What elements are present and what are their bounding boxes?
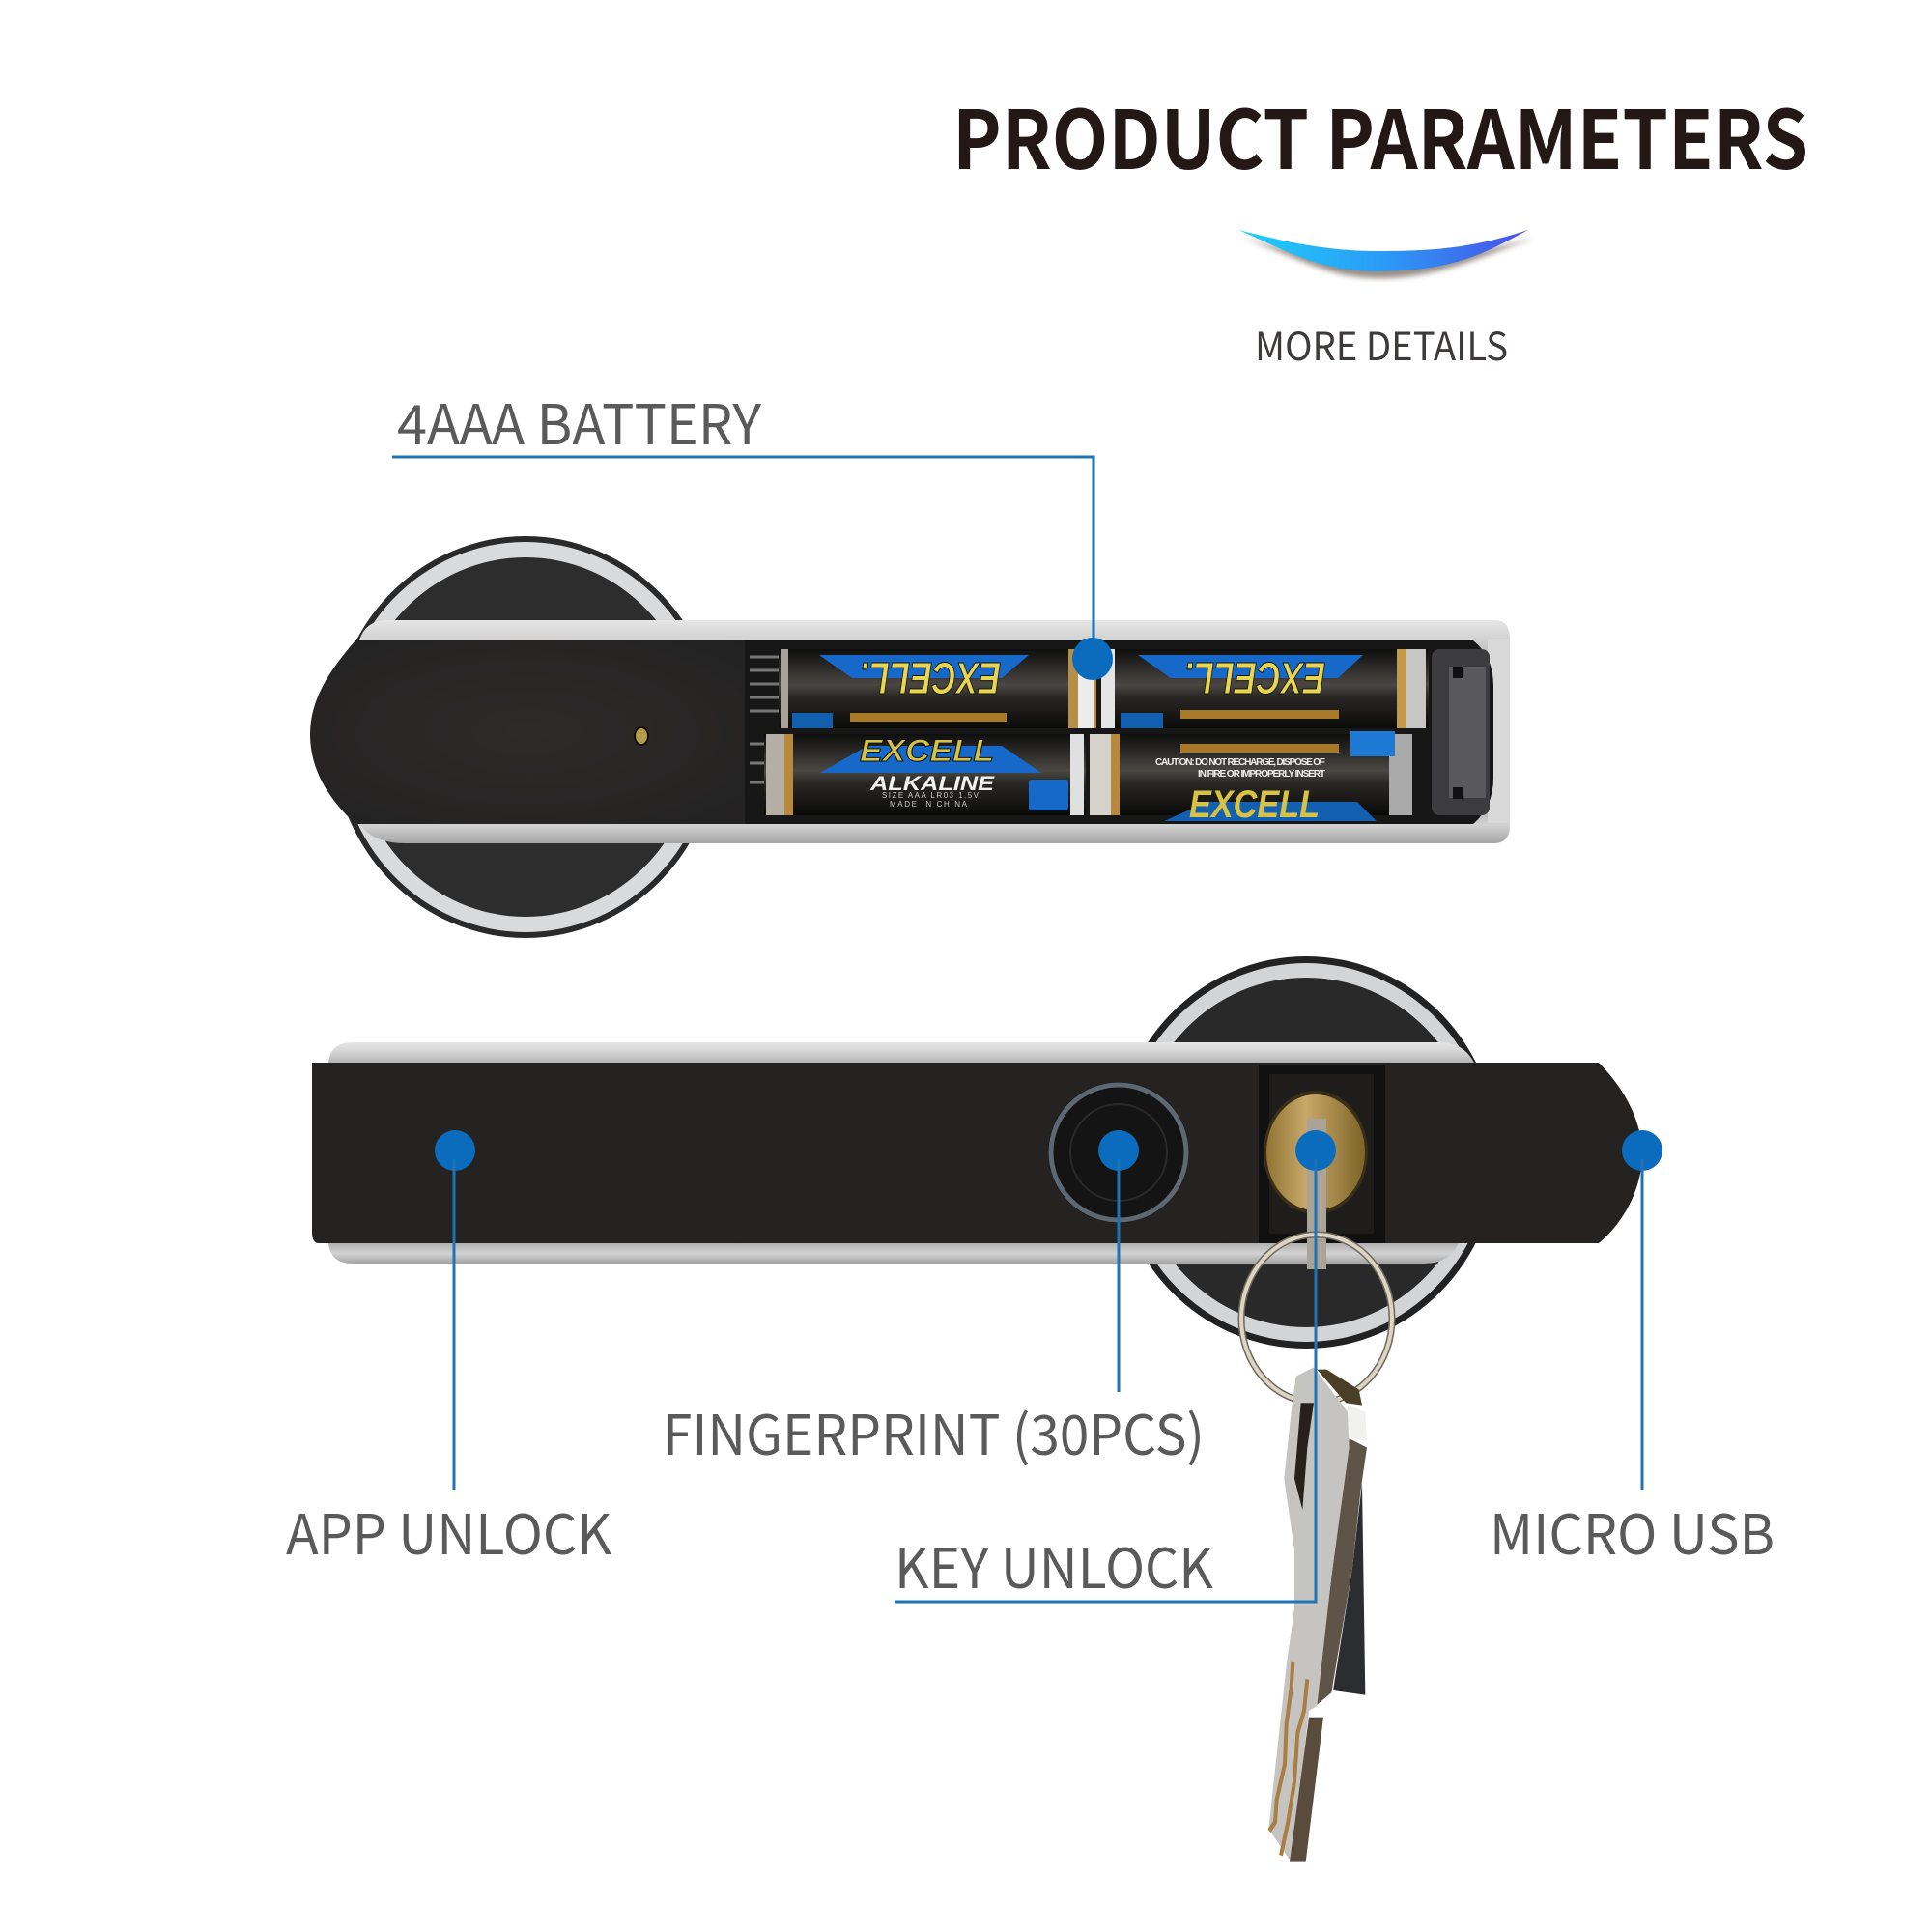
battery upper right: [1101, 649, 1429, 728]
battery upper left: EXCELL.: [860, 653, 1001, 703]
decorative blue swoosh: [1238, 230, 1535, 278]
rosette disc behind bottom handle: [1115, 956, 1497, 1349]
callout: app unlock: [286, 1130, 611, 1571]
battery lower right: EXCELL: [1189, 783, 1320, 826]
status LED: [635, 727, 648, 745]
battery upper left: [779, 649, 1096, 728]
silver housing bottom handle: [328, 1042, 1474, 1264]
callout: key unlock: KEY UNLOCK: [895, 1525, 1213, 1605]
key body: [1268, 1367, 1367, 1862]
key cylinder recess: [1259, 1065, 1385, 1243]
callout: app unlock: APP UNLOCK: [286, 1492, 611, 1571]
silver housing top handle: [359, 620, 1510, 843]
battery upper right: EXCELL.: [1184, 653, 1325, 703]
battery lower left: EXCELL: [860, 733, 994, 768]
callout: micro usb: MICRO USB: [1490, 1492, 1775, 1571]
battery lower right: CAUTION: DO NOT RECHARGE, DISPOSE OF: [1155, 757, 1325, 768]
battery lower left: ALKALINE: [869, 773, 995, 795]
battery compartment: [745, 640, 1493, 826]
bottom handle: fingerprint and key view: [312, 956, 1642, 1349]
callout: 4AAA battery: [392, 382, 1113, 680]
key shank in cylinder: [1307, 1119, 1326, 1269]
brass lock cylinder: [1264, 1091, 1368, 1214]
rosette disc behind top handle: [332, 536, 719, 938]
title: PRODUCT PARAMETERS: [952, 76, 1808, 193]
battery lower right: [1090, 731, 1412, 826]
battery lower left: SIZE AAA LR03 1.5V: [882, 791, 980, 800]
callout: fingerprint: [663, 1130, 1205, 1471]
callout: micro usb: [1490, 1130, 1775, 1571]
callout: fingerprint: FINGERPRINT (30PCS): [663, 1392, 1205, 1471]
battery lower left: [764, 733, 1086, 815]
key and key ring: [1241, 1119, 1392, 1862]
subtitle: MORE DETAILS: [1255, 316, 1508, 372]
top handle: battery compartment view: [310, 536, 1510, 938]
fingerprint sensor: [1048, 1082, 1189, 1223]
callout: 4AAA battery: 4AAA BATTERY: [397, 382, 762, 461]
key ring: [1241, 1235, 1392, 1403]
battery lower left: MADE IN CHINA: [890, 800, 968, 809]
black handle body: [312, 1063, 1642, 1243]
infographic canvas: [286, 108, 1805, 1862]
battery lower right: IN FIRE OR IMPROPERLY INSERT: [1198, 769, 1325, 780]
black grip cap: [310, 640, 745, 824]
callout: key unlock: [895, 1130, 1336, 1605]
